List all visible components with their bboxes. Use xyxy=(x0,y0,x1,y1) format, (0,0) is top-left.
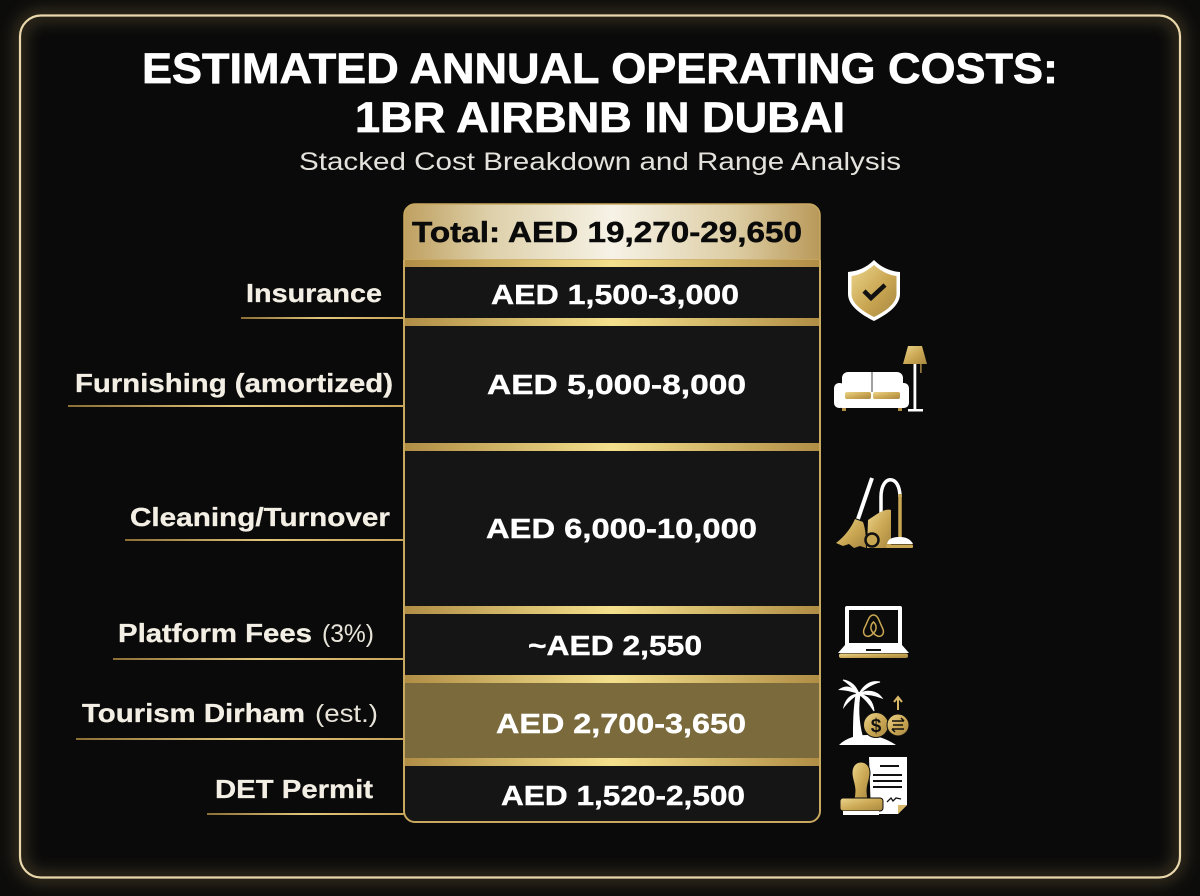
value: platform fees: ~AED 2,550 xyxy=(528,630,702,661)
title xyxy=(142,45,1058,142)
label: DET permit: DET Permit xyxy=(215,774,373,804)
segment: tourism dirham highlight xyxy=(405,683,819,758)
label: tourism dirham: (est.) xyxy=(315,700,378,728)
table border xyxy=(404,260,820,822)
icon: broom and vacuum xyxy=(836,478,913,548)
stacked cost table xyxy=(404,204,820,822)
value: cleaning: AED 6,000-10,000 xyxy=(486,513,757,544)
title: 1BR AIRBNB IN DUBAI xyxy=(355,94,845,142)
label: tourism dirham xyxy=(76,698,404,740)
icon: sofa and lamp xyxy=(834,346,927,412)
icon: laptop with Airbnb mark xyxy=(838,606,909,658)
total header xyxy=(404,204,820,260)
total header: Total: AED 19,270-29,650 xyxy=(412,217,802,249)
icon: palm tree and coins xyxy=(838,680,909,745)
icon: stamp and document xyxy=(840,757,907,815)
icon: palm tree and coins: $ xyxy=(871,716,882,737)
icon: shield xyxy=(848,260,900,321)
label: insurance: Insurance xyxy=(246,278,382,308)
table background xyxy=(404,204,820,822)
value: DET permit: AED 1,520-2,500 xyxy=(501,780,745,811)
label: furnishing: Furnishing (amortized) xyxy=(75,368,393,398)
separators xyxy=(404,260,820,766)
title: ESTIMATED ANNUAL OPERATING COSTS: xyxy=(142,45,1058,93)
subtitle: Stacked Cost Breakdown and Range Analysis xyxy=(299,148,901,176)
value: furnishing: AED 5,000-8,000 xyxy=(487,369,746,400)
label: tourism dirham: Tourism Dirham xyxy=(82,698,305,728)
value: insurance: AED 1,500-3,000 xyxy=(491,279,739,310)
label: platform fees: (3%) xyxy=(322,620,374,648)
value: tourism dirham: AED 2,700-3,650 xyxy=(496,708,746,739)
label: cleaning: Cleaning/Turnover xyxy=(130,502,390,532)
label: platform fees xyxy=(113,618,404,660)
label: platform fees: Platform Fees xyxy=(118,618,312,648)
